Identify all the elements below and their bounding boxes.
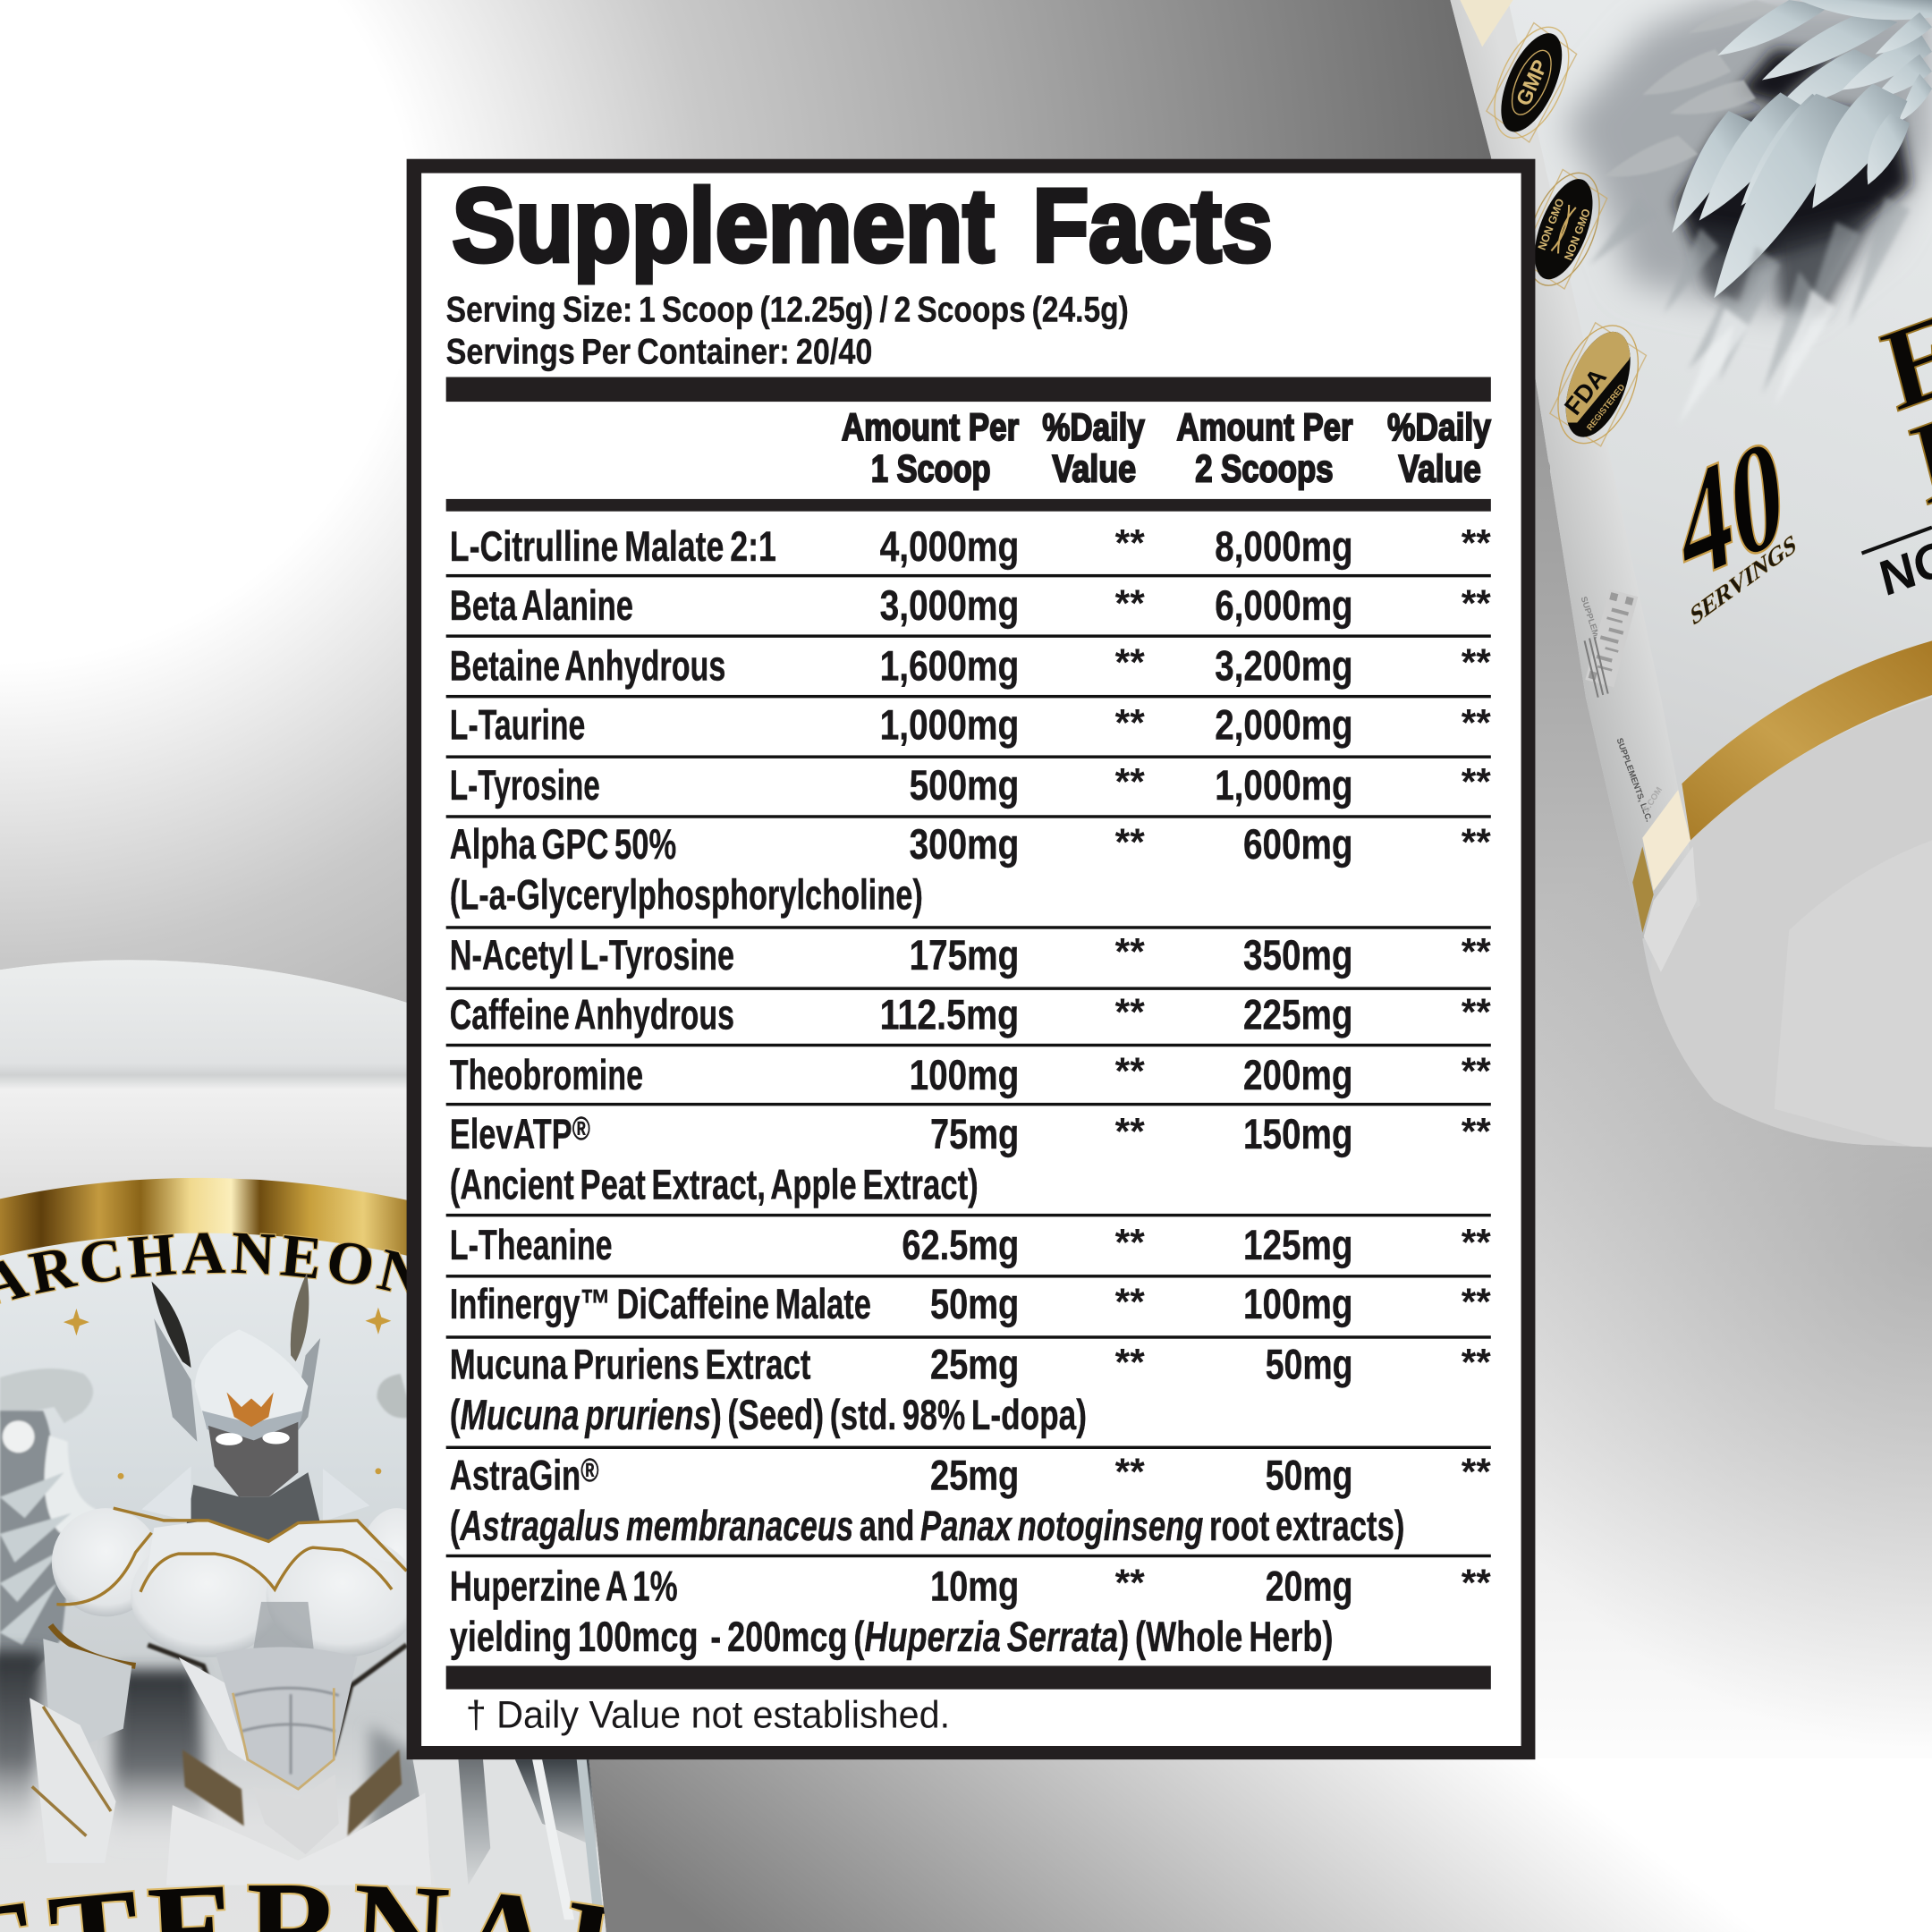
row: L-Theanine: 62.5mg [902,1222,1019,1268]
torso side panels [179,1657,247,1762]
dark armour lines [148,1645,407,1756]
row: ElevATP: (Ancient Peat Extract, Apple Extract) [450,1161,979,1208]
row: Theobromine: ** [1462,1050,1491,1093]
row: N-Acetyl L-Tyrosine: 350mg [1243,932,1353,979]
row: L-Theanine: ** [1115,1222,1145,1265]
row: Mucuna Pruriens: (Mucuna pruriens) (Seed) (std. 98% L-dopa) [450,1392,1087,1438]
title rule [1861,528,1932,554]
badge: FDA [1543,296,1654,454]
gold band end [1632,846,1654,933]
ab lines [234,1688,339,1775]
title: Facts [1032,167,1273,284]
row: Alpha GPC: 300mg [910,821,1019,868]
base highlight [1644,846,1697,972]
row: Infinergy: ** [1462,1281,1491,1324]
servings caption: SERVINGS [1689,529,1798,632]
column headers: 2 Scoops [1195,448,1334,491]
sparkle stars [64,1308,391,1479]
forearm gold strap [32,1707,111,1836]
shadows behind arms and torso [0,1651,431,1848]
badge: non-GMO [1513,163,1614,295]
chest top plate [146,1521,401,1583]
face [208,1422,298,1497]
row: L-Citrulline Malate: 8,000mg [1215,523,1353,570]
fine print: SUPPLEMENTS LLC [1579,596,1614,678]
row: Infinergy: ** [1115,1281,1145,1324]
row: L-Taurine: ** [1462,701,1491,744]
bottom thick bar [446,1665,1491,1690]
badge: non-GMO: NON GMO [1562,207,1593,262]
right pauldron [360,1508,434,1616]
fine print [1579,596,1665,824]
QR code [1585,589,1638,687]
serving info: Serving Size: 1 Scoop (12.25g) / 2 Scoops (24.5g) [446,291,1129,330]
row: Caffeine Anhydrous [450,991,1491,1038]
row: ElevATP: 150mg [1243,1111,1353,1157]
row: L-Tyrosine: 1,000mg [1215,762,1353,809]
angel figure [30,1273,434,1885]
row: Mucuna Pruriens [450,1341,1491,1438]
forearm guard [30,1698,115,1863]
row: Caffeine Anhydrous: 112.5mg [880,991,1019,1038]
row: Caffeine Anhydrous: 225mg [1243,991,1353,1038]
row: Alpha GPC: (L-a-Glycerylphosphorylcholine) [450,872,923,919]
row: Infinergy: 50mg [930,1281,1019,1327]
product jar: top right [1429,0,1932,1158]
row: AstraGin: AstraGin [450,1452,627,1498]
row: L-Tyrosine: ** [1115,761,1145,804]
helmet plumes [151,1282,191,1368]
cream foil band [1642,790,1690,891]
column headers [842,406,1491,491]
row: Alpha GPC: ** [1462,821,1491,864]
jar lid [0,960,412,1208]
row: L-Theanine: ** [1462,1222,1491,1265]
fine print: SUPPLEMENTS, LLC. [1614,737,1654,824]
waist guard left [182,1750,244,1826]
helmet left wing feathers [154,1318,197,1442]
panel frame [407,159,1535,1759]
row: Huperzine A: ** [1115,1562,1145,1605]
jar body [1429,0,1932,1158]
row: Mucuna Pruriens: Mucuna Pruriens Extract [450,1341,811,1387]
row: Alpha GPC [450,821,1491,919]
waist guard right [347,1750,402,1836]
row: L-Theanine [450,1222,1491,1268]
row: L-Tyrosine: 500mg [910,762,1019,809]
column headers: %Daily [1042,406,1145,449]
glowing eye right [262,1432,290,1444]
row: L-Citrulline Malate: L-Citrulline Malate 2:1 [450,523,776,570]
row: L-Citrulline Malate: 4,000mg [880,523,1019,570]
pale lower feathers [1678,290,1836,425]
row: N-Acetyl L-Tyrosine: 175mg [910,932,1019,979]
product jar: bottom left [0,960,606,1932]
badge: GMP: GMP [1512,56,1552,109]
row: Beta Alanine: Beta Alanine [450,582,633,629]
row: ElevATP: ElevATP [450,1111,616,1157]
title: Supplement [453,167,995,284]
gold foil band [0,1178,412,1257]
row: L-Citrulline Malate: ** [1462,521,1491,564]
row: L-Taurine: 1,000mg [880,702,1019,749]
row dividers [446,574,1491,1557]
column headers: Amount Per [842,406,1019,449]
header bar [446,499,1491,512]
serving info: Servings Per Container: 20/40 [446,332,872,371]
FDA seal outline [1543,314,1654,454]
wings [0,1410,95,1669]
cream foil top [1460,0,1513,47]
row: Theobromine: ** [1115,1050,1145,1093]
row: Infinergy [450,1281,1491,1327]
footnote: † Daily Value not established. [466,1693,950,1736]
serving count: 40 [1673,401,1790,616]
gold band front [1682,640,1932,840]
FDA seal caption: REGISTERED [1585,383,1627,433]
row: L-Tyrosine: L-Tyrosine [450,762,600,809]
skirt center [252,1775,339,1854]
row: AstraGin: ® [580,1451,598,1488]
badge: GMP [1479,16,1584,149]
column headers: %Daily [1387,406,1491,449]
row: L-Citrulline Malate [450,521,1491,570]
row: Alpha GPC: ** [1115,821,1145,864]
row: Beta Alanine: ** [1462,582,1491,625]
scroll ornaments [0,1368,412,1423]
row: Theobromine: Theobromine [450,1052,643,1098]
chest left [131,1534,284,1657]
jar base [1639,698,1932,1158]
helmet right wing feathers [298,1338,320,1430]
chest right [267,1534,419,1657]
row: Caffeine Anhydrous: ** [1462,991,1491,1034]
row: L-Taurine: 2,000mg [1215,702,1353,749]
row: Huperzine A: yielding 100mcg - 200mcg (Huperzia Serrata) (Whole Herb) [450,1614,1334,1660]
row: Mucuna Pruriens: ** [1462,1341,1491,1384]
row: Betaine Anhydrous: Betaine Anhydrous [450,642,725,689]
FDA seal gold half [1546,296,1651,422]
column headers: Amount Per [1177,406,1353,449]
row: Mucuna Pruriens: ** [1115,1341,1145,1384]
row: Betaine Anhydrous [450,641,1491,689]
wing lower shadows [1688,209,1873,314]
row: Infinergy: Infinergy™ DiCaffeine Malate [450,1281,871,1327]
row: AstraGin [450,1451,1491,1549]
row: L-Citrulline Malate: ** [1115,521,1145,564]
chest gold trim [50,1508,407,1665]
row: AstraGin: 25mg [930,1452,1019,1498]
row: ElevATP [450,1109,1491,1208]
serving info [446,291,1129,371]
FDA seal lettering: FDA [1559,363,1612,420]
neck [185,1472,323,1553]
row: ElevATP: ** [1115,1111,1145,1154]
fine print: S.COM [1641,785,1665,815]
center shadow [252,1602,314,1654]
row: AstraGin: ** [1462,1451,1491,1494]
row: Betaine Anhydrous: 1,600mg [880,642,1019,689]
row: Theobromine: 100mg [910,1052,1019,1098]
row: Alpha GPC: Alpha GPC 50% [450,821,676,868]
row: Beta Alanine [450,582,1491,629]
row: ElevATP: 75mg [930,1111,1019,1157]
column headers: 1 Scoop [871,448,991,491]
barcode [1585,637,1608,698]
arm [43,1639,131,1750]
row: L-Taurine [450,701,1491,749]
row: AstraGin: 50mg [1266,1452,1353,1498]
row: Beta Alanine: 6,000mg [1215,582,1353,629]
helmet plume right [291,1273,309,1361]
glowing eye left [216,1433,242,1445]
row: Huperzine A [450,1562,1491,1660]
badge: non-GMO: NON GMO [1536,197,1567,252]
row: L-Theanine: L-Theanine [450,1222,613,1268]
signature scribble [1543,453,1553,508]
row: Mucuna Pruriens: 25mg [930,1341,1019,1387]
jar label [0,1216,606,1932]
visor [202,1411,303,1440]
column headers: Value [1399,448,1481,491]
row: Huperzine A: 20mg [1266,1563,1353,1609]
row: Caffeine Anhydrous: ** [1115,991,1145,1034]
row: Betaine Anhydrous: ** [1462,641,1491,684]
row: Mucuna Pruriens: 50mg [1266,1341,1353,1387]
row: AstraGin: ** [1115,1451,1145,1494]
column headers: Value [1052,448,1136,491]
feathers beside panel [412,1759,606,1932]
row: N-Acetyl L-Tyrosine: ** [1115,931,1145,974]
row: Alpha GPC: 600mg [1243,821,1353,868]
helmet [195,1329,308,1420]
lid rim [1775,840,1932,1152]
product title letters [1871,286,1932,530]
row: Caffeine Anhydrous: Caffeine Anhydrous [450,991,734,1038]
row: Infinergy: 100mg [1243,1281,1353,1327]
row: ElevATP: ** [1462,1111,1491,1154]
wing dark core [1675,49,1910,265]
row: Huperzine A: ** [1462,1562,1491,1605]
row: Betaine Anhydrous: 3,200mg [1215,642,1353,689]
wing soft underlay [1564,0,1932,313]
row: N-Acetyl L-Tyrosine: N-Acetyl L-Tyrosine [450,932,734,979]
row: Huperzine A: Huperzine A 1% [450,1563,678,1609]
left pauldron [52,1508,160,1616]
row: L-Taurine: ** [1115,701,1145,744]
row: Theobromine: 200mg [1243,1052,1353,1098]
panel: supplement facts [407,159,1535,1759]
row: N-Acetyl L-Tyrosine: ** [1462,931,1491,974]
panel interior [421,174,1521,1746]
row: AstraGin: (Astragalus membranaceus and Panax notoginseng root extracts) [450,1503,1404,1549]
row: Betaine Anhydrous: ** [1115,641,1145,684]
row: L-Taurine: L-Taurine [450,702,585,749]
row: L-Tyrosine: ** [1462,761,1491,804]
row: Huperzine A: 10mg [930,1563,1019,1609]
upper shoulder capes [141,1466,369,1521]
top thick bar [446,377,1491,402]
belt trim [233,1688,334,1789]
row: N-Acetyl L-Tyrosine [450,931,1491,979]
wing tips fade [1589,197,1910,394]
row: L-Theanine: 125mg [1243,1222,1353,1268]
skirt [166,1792,431,1885]
row: Beta Alanine: ** [1115,582,1145,625]
crest [226,1393,274,1427]
wing feathers [1672,0,1932,298]
label seam strip [1450,0,1700,939]
torso [216,1647,357,1789]
row: L-Tyrosine [450,761,1491,809]
row: Theobromine [450,1050,1491,1098]
row: Beta Alanine: 3,000mg [880,582,1019,629]
soft upper feathers [1605,0,1781,177]
row: ElevATP: ® [572,1109,590,1147]
